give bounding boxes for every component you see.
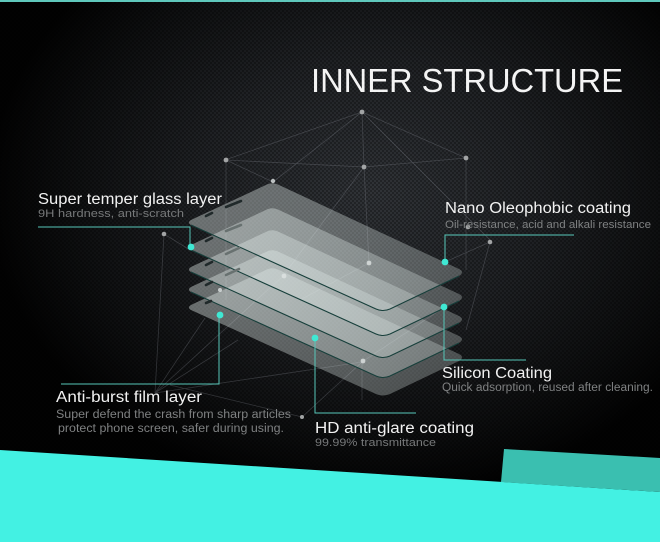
callout: Anti-burst film layer: Anti-burst film layer: [56, 389, 202, 406]
callout: Nano Oleophobic coating: Oil-resistance, acid and alkali resistance: [445, 219, 651, 231]
callout: Nano Oleophobic coating: Nano Oleophobic coating: [445, 200, 631, 217]
layer 5: [189, 268, 462, 396]
layer 2: [189, 208, 462, 336]
network nodes: [162, 110, 492, 419]
callout: Super temper glass layer: [38, 191, 222, 250]
callout: Silicon Coating: [441, 304, 653, 394]
teal footer band: [0, 450, 660, 542]
network lines: [155, 112, 490, 417]
darker teal tab: [501, 449, 660, 492]
callout: HD anti-glare coating: HD anti-glare coating: [315, 420, 474, 437]
glass layer stack: [189, 183, 462, 396]
callout: Super temper glass layer: Super temper glass layer: [38, 191, 222, 208]
callout: Silicon Coating: Quick adsorption, reused after cleaning.: [442, 382, 653, 394]
callout: Nano Oleophobic coating: [442, 200, 651, 265]
callout: HD anti-glare coating: 99.99% transmittance: [315, 437, 436, 449]
glow nodes on glass: [218, 179, 371, 363]
callout: Anti-burst film layer: [56, 312, 291, 435]
layer 4: [189, 250, 462, 378]
layer 3: [189, 230, 462, 358]
layer 1: [189, 183, 462, 310]
callout: HD anti-glare coating: [312, 335, 474, 449]
speaker slots: [206, 201, 241, 303]
top accent line: [0, 0, 660, 2]
callout: Anti-burst film layer: Super defend the crash from sharp articles: [56, 409, 291, 421]
title: INNER STRUCTURE: [311, 63, 623, 100]
callout: Silicon Coating: Silicon Coating: [442, 365, 552, 382]
callout: Super temper glass layer: 9H hardness, anti-scratch: [38, 208, 184, 220]
callout: Anti-burst film layer: protect phone screen, safer during using.: [58, 423, 284, 435]
